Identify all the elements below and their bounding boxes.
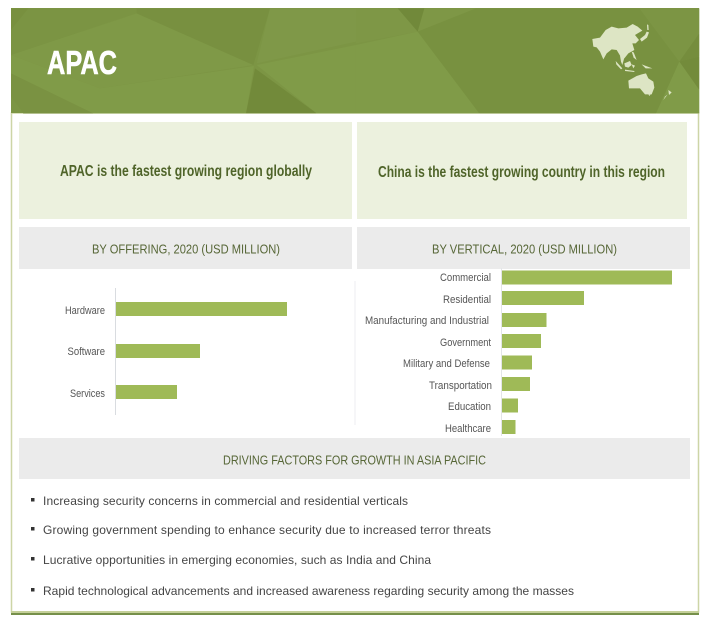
bar: commercial: [440, 270, 672, 284]
bar: transportation: Transportation: [429, 380, 492, 392]
bar: residential: Residential: [443, 294, 491, 306]
bar chart: offering: [65, 281, 356, 425]
bar: government: Government: [440, 337, 491, 349]
bar: military and defense: [403, 356, 532, 370]
heading: driving factors: DRIVING FACTORS FOR GROWTH IN ASIA PACIFIC: [223, 454, 486, 468]
bullet 2: Growing government spending to enhance security due to increased terror threats: [43, 523, 491, 537]
bar: transportation: [429, 377, 530, 392]
bar: healthcare: Healthcare: [445, 423, 491, 435]
bar: education: Education: [448, 401, 491, 413]
heading: driving factors: [19, 438, 690, 479]
heading: by offering: [19, 227, 352, 269]
bar: manufacturing and industrial: [365, 313, 546, 327]
bar: software: Software: [68, 346, 105, 358]
bullet 1: Increasing security concerns in commercial and residential verticals: [43, 494, 408, 508]
bar: healthcare: [445, 420, 516, 435]
panel: page frame: [11, 113, 699, 615]
title: APAC: [47, 44, 117, 81]
bar: government: [440, 334, 541, 349]
panel: callout region: APAC is the fastest growing region globally: [60, 163, 312, 180]
heading: by vertical: BY VERTICAL, 2020 (USD MILLION): [432, 242, 617, 256]
bullet 4: Rapid technological advancements and increased awareness regarding security among the masses: [43, 584, 574, 598]
bar: residential: [443, 291, 584, 306]
heading: by vertical: [357, 227, 690, 269]
bullet 3: Lucrative opportunities in emerging economies, such as India and China: [43, 553, 431, 567]
bar chart: vertical: [365, 268, 672, 436]
bar: commercial: Commercial: [440, 272, 491, 284]
icon: Asia Pacific map: [592, 24, 672, 100]
panel: header banner: [11, 8, 699, 113]
bar: hardware: [65, 302, 287, 317]
bar: services: Services: [70, 388, 105, 400]
bar: manufacturing and industrial: Manufacturing and Industrial: [365, 315, 489, 327]
heading: by offering: BY OFFERING, 2020 (USD MILLION): [92, 242, 280, 256]
bar: military and defense: Military and Defense: [403, 358, 490, 370]
bar: software: [68, 344, 200, 358]
panel: callout country: [357, 122, 687, 219]
bar: hardware: Hardware: [65, 305, 105, 317]
panel: callout region: [19, 122, 352, 219]
list: driving factors: [31, 494, 574, 598]
bar: education: [448, 398, 518, 413]
bar: services: [70, 385, 177, 400]
